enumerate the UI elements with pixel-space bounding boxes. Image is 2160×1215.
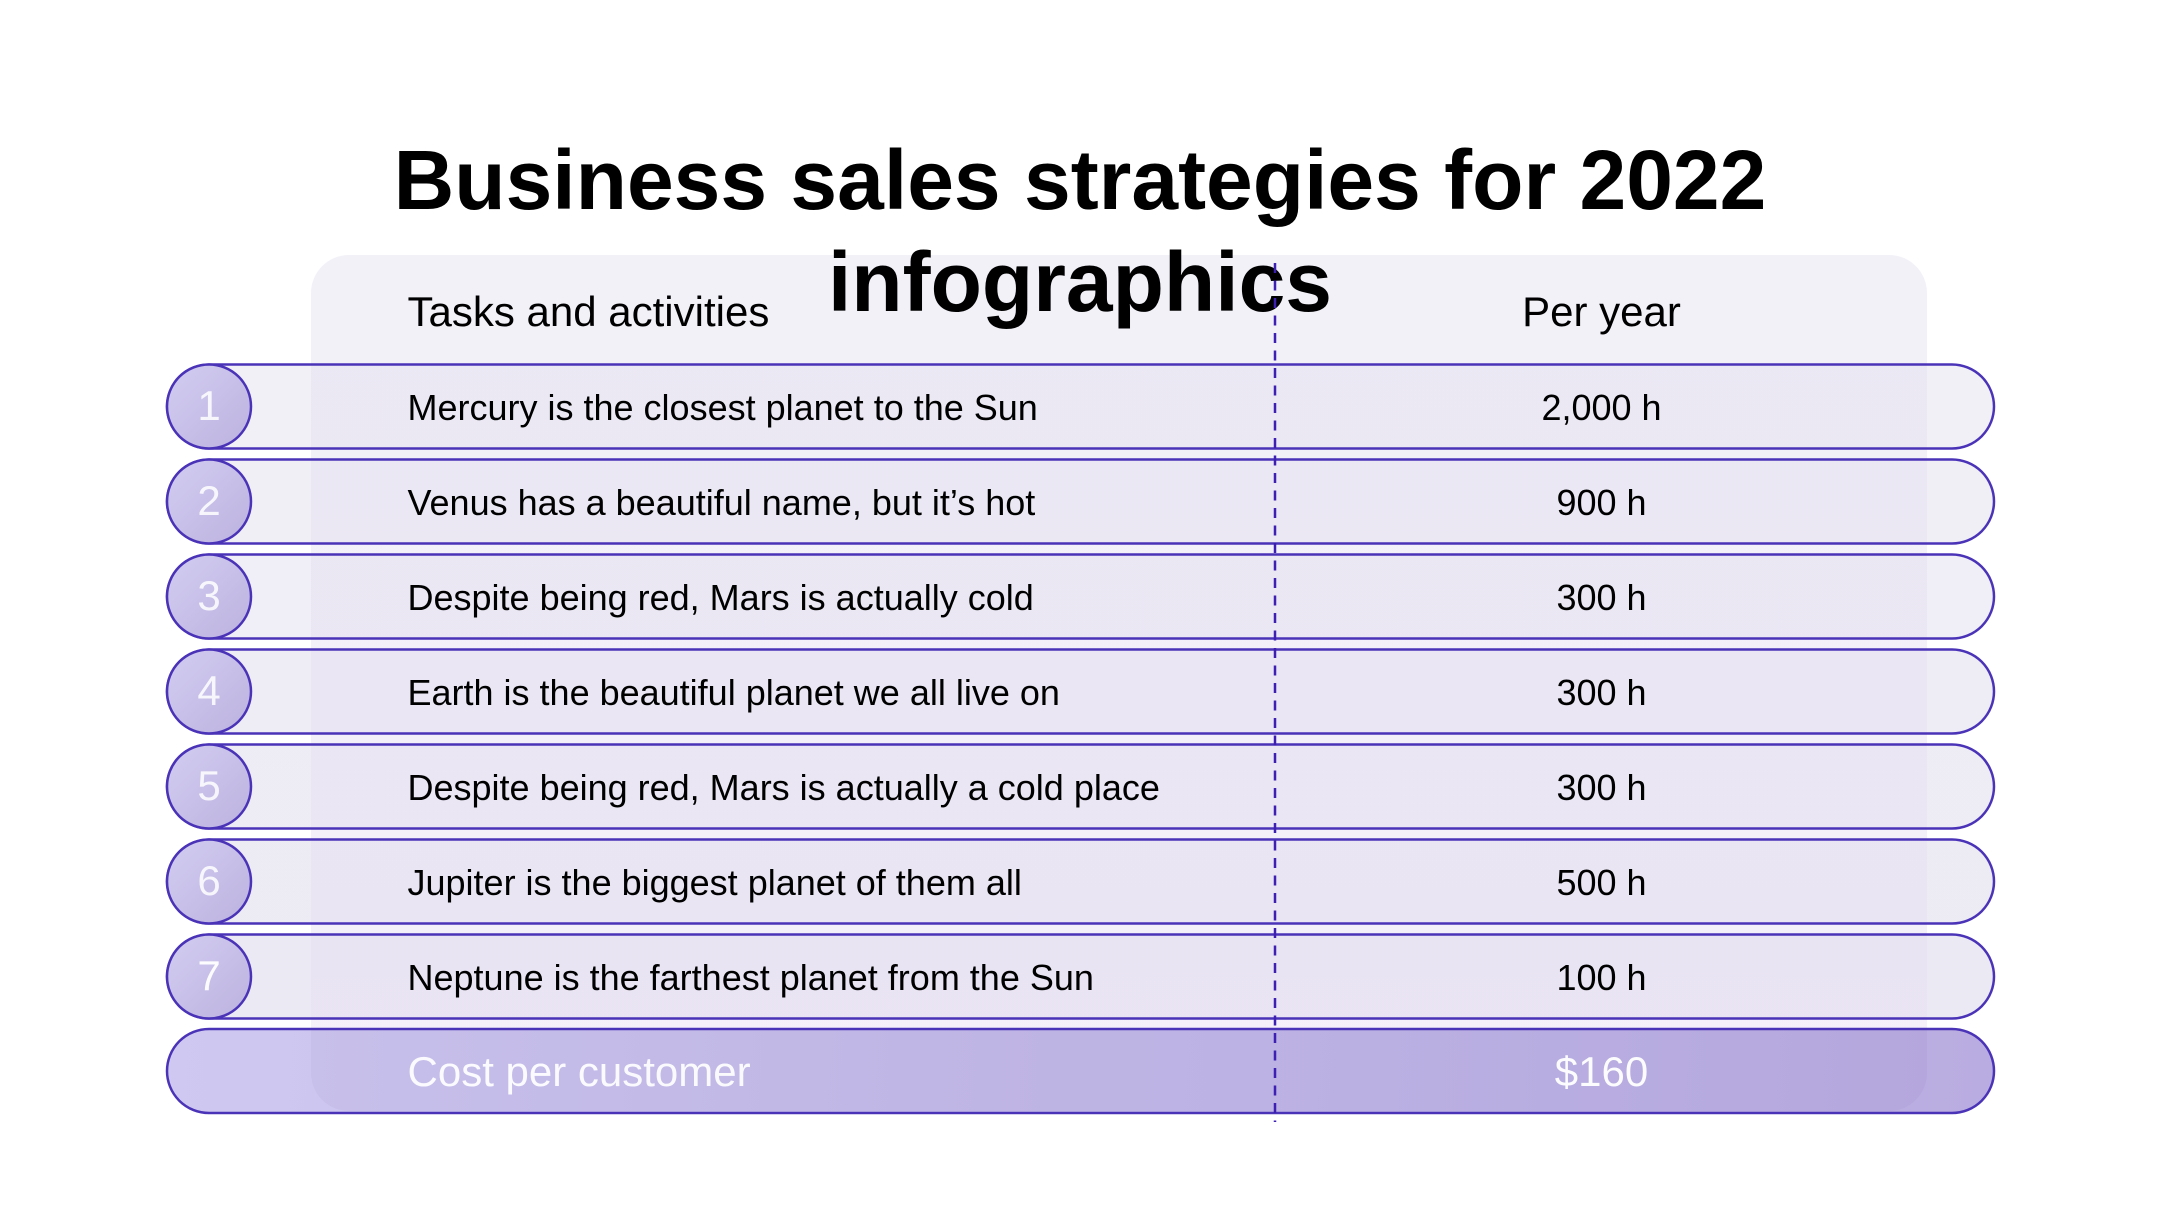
row 6: Jupiter: 500 h	[1556, 862, 1647, 903]
row 3: Mars: 3	[197, 572, 221, 619]
row 3: Mars: 300 h	[1556, 577, 1647, 618]
row 7: Neptune	[167, 934, 1994, 1018]
row 2: Venus: 2	[197, 477, 221, 524]
row 2: Venus	[167, 460, 1994, 544]
row 6: Jupiter	[167, 840, 1994, 924]
row 2: Venus: Venus has a beautiful name, but it’s hot	[408, 482, 1035, 523]
row: cost per customer total	[166, 1028, 1996, 1114]
row 5: Mars cold place: 300 h	[1556, 767, 1647, 808]
row 3: Mars: Despite being red, Mars is actually cold	[408, 577, 1034, 618]
row 1: Mercury: 2,000 h	[1541, 387, 1662, 428]
panel: table background	[311, 255, 1927, 1111]
row 4: Earth	[167, 650, 1994, 734]
title: infographics	[828, 235, 1332, 329]
row 5: Mars cold place: Despite being red, Mars is actually a cold place	[408, 767, 1160, 808]
row 4: Earth: 4	[197, 667, 221, 714]
row: cost per customer total: Cost per customer	[408, 1048, 751, 1095]
row 6: Jupiter: Jupiter is the biggest planet of them all	[408, 862, 1022, 903]
row: cost per customer total: $160	[1555, 1048, 1648, 1095]
heading: tasks column: Tasks and activities	[408, 288, 769, 335]
row 4: Earth: 300 h	[1556, 672, 1647, 713]
row 2: Venus: 900 h	[1556, 482, 1647, 523]
row 7: Neptune: 7	[197, 952, 221, 999]
row 5: Mars cold place	[167, 744, 1994, 828]
row 7: Neptune: Neptune is the farthest planet from the Sun	[408, 957, 1094, 998]
row 1: Mercury	[167, 364, 1994, 448]
heading: per year column: Per year	[1522, 288, 1681, 335]
title: Business sales strategies for 2022	[394, 133, 1766, 227]
column divider dashed line	[1274, 263, 1276, 1122]
row 7: Neptune: 100 h	[1556, 957, 1647, 998]
row 6: Jupiter: 6	[197, 857, 221, 904]
row 3: Mars	[167, 554, 1994, 638]
row 4: Earth: Earth is the beautiful planet we all live on	[408, 672, 1060, 713]
row 1: Mercury: Mercury is the closest planet to the Sun	[408, 387, 1038, 428]
row 1: Mercury: 1	[197, 382, 221, 429]
row 5: Mars cold place: 5	[197, 762, 221, 809]
